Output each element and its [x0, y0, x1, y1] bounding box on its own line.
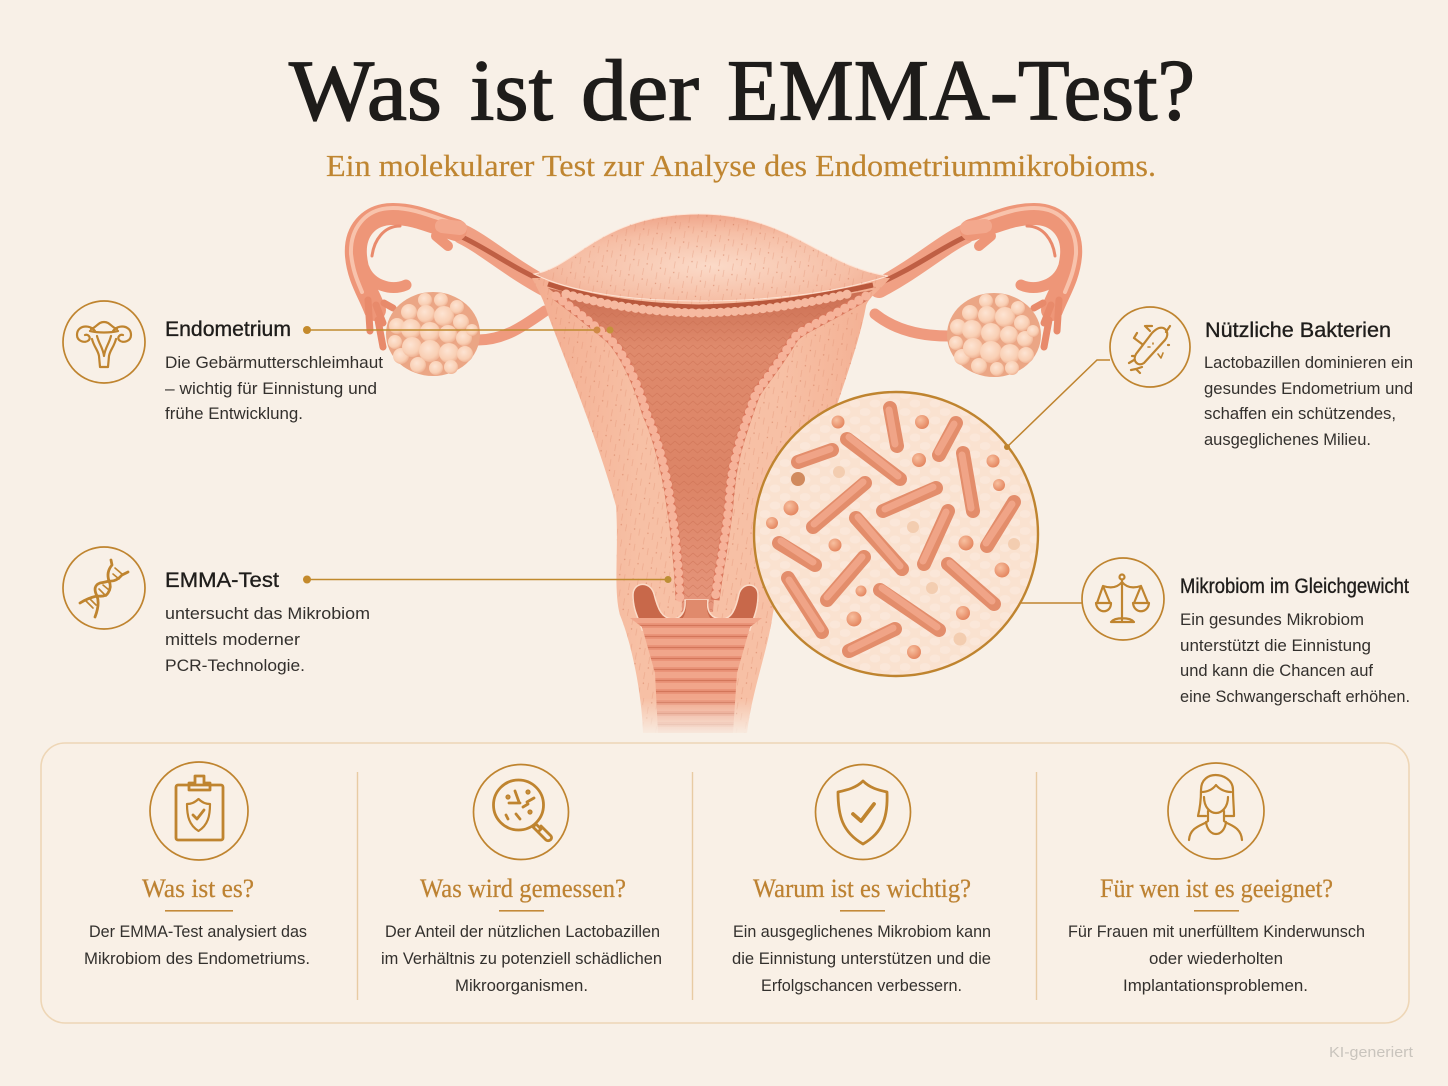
- description: – wichtig für Einnistung und: [165, 379, 377, 398]
- dark band under dome: [548, 284, 873, 307]
- description: ausgeglichenes Milieu.: [1204, 430, 1371, 449]
- central canal between lips: [681, 600, 712, 620]
- footer note: KI-generiert: [1329, 1045, 1413, 1061]
- description: Implantationsproblemen.: [1123, 976, 1308, 995]
- description: Ein ausgeglichenes Mikrobiom kann: [733, 922, 991, 941]
- endometrium beads left: [556, 296, 680, 600]
- description: frühe Entwicklung.: [165, 404, 303, 423]
- description: [381, 922, 662, 995]
- endometrium lining left: [556, 296, 680, 600]
- description: oder wiederholten: [1149, 949, 1283, 968]
- underline: [1194, 910, 1239, 912]
- icon: bacterium: [1110, 307, 1190, 387]
- dome texture: [534, 214, 888, 301]
- description: die Einnistung unterstützen und die: [732, 949, 991, 968]
- left ovary: [386, 292, 480, 376]
- description: [165, 353, 383, 423]
- column: Warum ist es wichtig?: [732, 764, 991, 995]
- fundus dome: [534, 214, 888, 301]
- column: Für wen ist es geeignet?: [1068, 763, 1365, 995]
- title: der: [581, 42, 699, 138]
- heading: Für wen ist es geeignet?: [1100, 874, 1333, 903]
- callout: EMMA-Test: [63, 547, 672, 675]
- description: Die Gebärmutterschleimhaut: [165, 353, 383, 372]
- title: Was: [289, 42, 442, 138]
- description: untersucht das Mikrobiom: [165, 604, 370, 623]
- heading: Was ist es?: [142, 874, 254, 903]
- left fallopian tube: [351, 208, 552, 347]
- underline: [499, 910, 544, 912]
- description: eine Schwangerschaft erhöhen.: [1180, 687, 1410, 706]
- fade at bottom: [630, 698, 760, 738]
- connector line: [303, 326, 614, 334]
- icon: DNA: [63, 547, 145, 629]
- uterine cavity: [548, 288, 873, 612]
- description: PCR-Technologie.: [165, 656, 305, 675]
- round microbes: [766, 415, 1020, 659]
- heading: Warum ist es wichtig?: [753, 874, 971, 903]
- description: [165, 604, 370, 675]
- heading: Was wird gemessen?: [420, 874, 626, 903]
- heading: Mikrobiom im Gleichgewicht: [1180, 575, 1409, 598]
- fringe under dome: [566, 294, 848, 313]
- description: Der Anteil der nützlichen Lactobazillen: [385, 922, 660, 941]
- description: Ein gesundes Mikrobiom: [1180, 610, 1364, 629]
- description: [732, 922, 991, 995]
- lactobacilli rods: [779, 408, 1014, 651]
- magnified microbiome circle: [754, 392, 1038, 676]
- description: gesundes Endometrium und: [1204, 379, 1413, 398]
- endometrium lining right: [715, 296, 866, 600]
- description: [1180, 610, 1410, 706]
- right ovary: [947, 293, 1041, 377]
- description: im Verhältnis zu potenziell schädlichen: [381, 949, 662, 968]
- callout: Mikrobiom im Gleichgewicht: [1021, 558, 1410, 706]
- column: Was wird gemessen?: [381, 764, 662, 995]
- heading: Endometrium: [165, 318, 291, 341]
- vaginal canal: [630, 618, 765, 736]
- description: schaffen ein schützendes,: [1204, 404, 1396, 423]
- heading: Nützliche Bakterien: [1205, 319, 1391, 342]
- description: [1068, 922, 1365, 995]
- subtitle: Ein molekularer Test zur Analyse des Endometriummikrobioms.: [326, 148, 1156, 183]
- connector line: [1004, 360, 1110, 450]
- ovarian ligaments: [478, 311, 948, 340]
- description: [1204, 353, 1413, 449]
- description: unterstützt die Einnistung: [1180, 636, 1371, 655]
- callout: Endometrium: [63, 301, 614, 423]
- icon: scales: [1082, 558, 1164, 640]
- description: Mikroorganismen.: [455, 976, 588, 995]
- title: EMMA-Test?: [727, 42, 1195, 138]
- description: [84, 922, 310, 968]
- connector line: [303, 576, 672, 584]
- uterus anatomical illustration: [351, 208, 1076, 738]
- underline: [840, 910, 885, 912]
- uterine wall: [532, 278, 890, 733]
- icon: magnifier with microbes: [474, 764, 568, 860]
- endometrium beads right: [715, 296, 866, 600]
- description: Der EMMA-Test analysiert das: [89, 922, 307, 941]
- icon: woman: [1168, 763, 1264, 859]
- callout: Nützliche Bakterien: [1004, 307, 1413, 450]
- title: ist: [470, 42, 553, 138]
- description: Für Frauen mit unerfülltem Kinderwunsch: [1068, 922, 1365, 941]
- icon: shield with check: [816, 764, 910, 860]
- underline: [165, 910, 233, 912]
- panel: summary: [41, 743, 1409, 1023]
- column: Was ist es?: [84, 762, 310, 968]
- heading: EMMA-Test: [165, 569, 279, 592]
- description: mittels moderner: [165, 630, 300, 649]
- circle border: [754, 392, 1038, 676]
- description: Erfolgschancen verbessern.: [761, 976, 962, 995]
- description: Lactobazillen dominieren ein: [1204, 353, 1413, 372]
- connector line: [1021, 602, 1082, 604]
- description: und kann die Chancen auf: [1180, 661, 1373, 680]
- icon: uterus: [63, 301, 145, 383]
- icon: clipboard with shield: [150, 762, 248, 860]
- fornix and cervical lips: [633, 584, 758, 630]
- description: Mikrobiom des Endometriums.: [84, 949, 310, 968]
- right fallopian tube: [875, 208, 1076, 347]
- wall texture: [532, 278, 890, 733]
